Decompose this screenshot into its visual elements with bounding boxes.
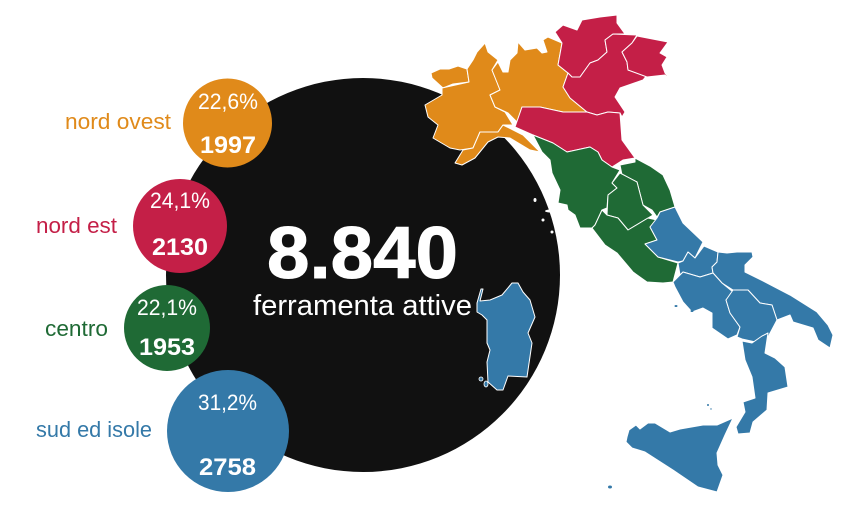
Sicilia [626,418,733,492]
sud ed isole bubble [167,370,289,492]
Friuli-Venezia Giulia [622,36,673,82]
Calabria [736,333,788,434]
centro label: centro [45,316,108,341]
Emilia-Romagna [515,107,635,167]
nord ovest bubble: 22,6% [198,89,258,114]
Piemonte [425,43,513,150]
Toscana [533,135,620,228]
centro bubble [124,285,210,371]
small islands [479,305,712,488]
Valle d'Aosta [431,66,469,88]
main black circle [166,78,560,472]
Lampedusa [608,486,612,488]
region group: nord ovest [425,37,587,165]
nord est bubble: 24,1% [150,188,210,213]
region group: nord est [515,15,673,167]
Liguria [455,125,540,165]
Campania [673,272,740,339]
nord est bubble: 2130 [152,234,208,261]
total number: 8.840 [267,213,458,294]
region group: centro [533,135,678,283]
Sant'Antioco and San Pietro [479,377,488,387]
Veneto [563,34,647,117]
Basilicata [726,290,777,343]
Trentino-Alto Adige [555,15,625,77]
sud ed isole label: sud ed isole [36,417,152,442]
region group: sud ed isole [477,207,833,492]
nord ovest label: nord ovest [65,109,171,134]
Capri [690,310,694,312]
nord ovest bubble: 1997 [200,132,256,159]
sud ed isole bubble: 2758 [199,454,256,481]
Marche [620,158,675,217]
nord est bubble [133,179,227,273]
Aeolian islands [707,404,712,410]
Abruzzo [645,207,703,262]
tuscan islands [534,198,555,234]
map of Italy [425,15,833,492]
nord ovest bubble [183,78,272,168]
Ischia [674,305,678,307]
nord est label: nord est [36,213,117,238]
sud ed isole bubble: 31,2% [198,390,257,415]
Lazio [592,210,678,283]
centro bubble: 22,1% [137,295,197,320]
centro bubble: 1953 [139,334,195,361]
Umbria [607,173,653,230]
Molise [678,246,718,277]
Sardegna [477,283,535,390]
total caption: ferramenta attive [253,290,472,322]
Puglia [712,252,833,348]
Lombardia [490,37,587,122]
